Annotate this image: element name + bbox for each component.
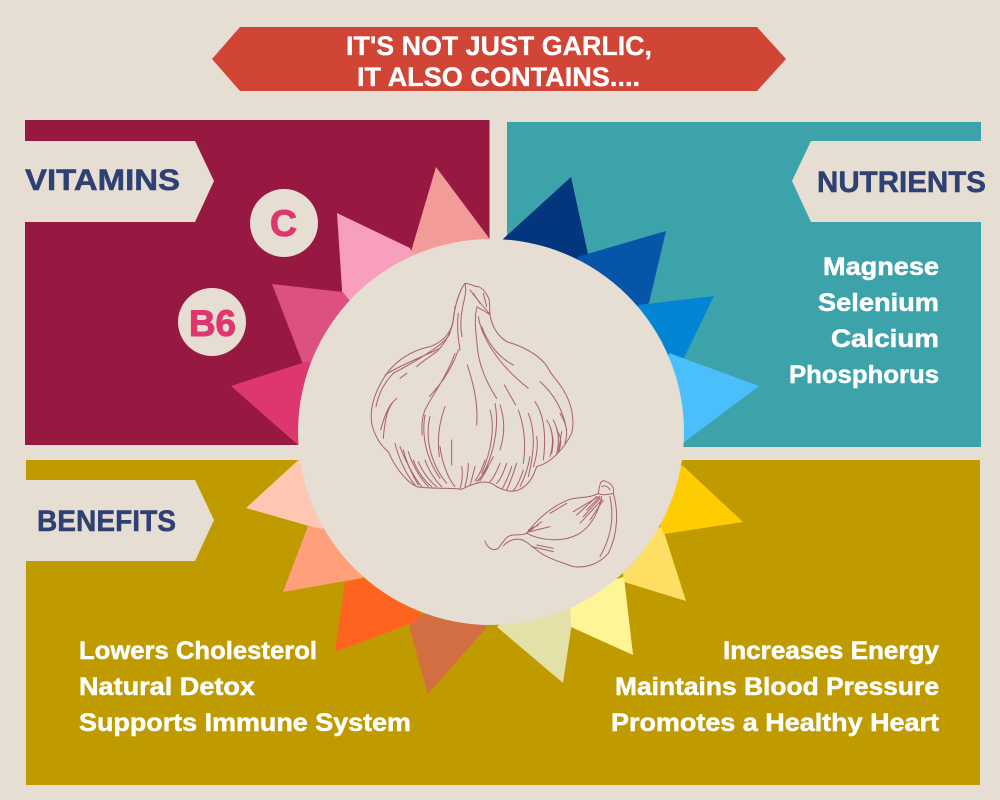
nutrients list (789, 253, 939, 389)
benefits list right (611, 637, 940, 737)
icon: garlic clove (485, 481, 617, 567)
title text: IT'S NOT JUST GARLIC, (346, 31, 652, 61)
vitamins heading tag: VITAMINS (25, 164, 180, 197)
icon: garlic bulb (371, 283, 573, 491)
benefits list right: Increases Energy (723, 637, 939, 665)
nutrients heading tag (792, 141, 1000, 222)
vitamins background (25, 120, 490, 445)
panel: benefits (26, 460, 980, 785)
benefits list left: Lowers Cholesterol (79, 637, 317, 665)
nutrients list: Selenium (818, 289, 939, 317)
benefits list left: Natural Detox (79, 673, 255, 701)
title text: IT ALSO CONTAINS.... (357, 62, 640, 92)
title banner (212, 27, 786, 92)
benefits list right: Promotes a Healthy Heart (611, 709, 940, 737)
center circle (298, 239, 684, 625)
benefits heading tag (26, 480, 214, 561)
vitamin B6 badge: B6 (189, 303, 236, 344)
nutrients list: Calcium (831, 325, 939, 353)
sunburst triangles (231, 167, 759, 694)
panel: nutrients (507, 122, 1000, 447)
vitamins heading tag (25, 141, 214, 222)
nutrients list: Magnese (823, 253, 939, 281)
benefits heading tag: BENEFITS (37, 505, 176, 538)
benefits list left: Supports Immune System (79, 709, 411, 737)
title text (346, 31, 652, 92)
banner shape (212, 27, 786, 91)
nutrients heading tag: NUTRIENTS (817, 166, 986, 199)
icon: garlic illustration (371, 283, 617, 567)
nutrients list: Phosphorus (789, 361, 939, 389)
nutrients background (507, 122, 981, 447)
panel: vitamins (25, 120, 490, 445)
benefits list left (79, 637, 411, 737)
benefits list right: Maintains Blood Pressure (615, 673, 939, 701)
vitamin C badge (250, 189, 318, 257)
vitamin B6 badge (178, 288, 246, 356)
vitamin C badge: C (270, 203, 297, 244)
benefits background (26, 460, 980, 785)
